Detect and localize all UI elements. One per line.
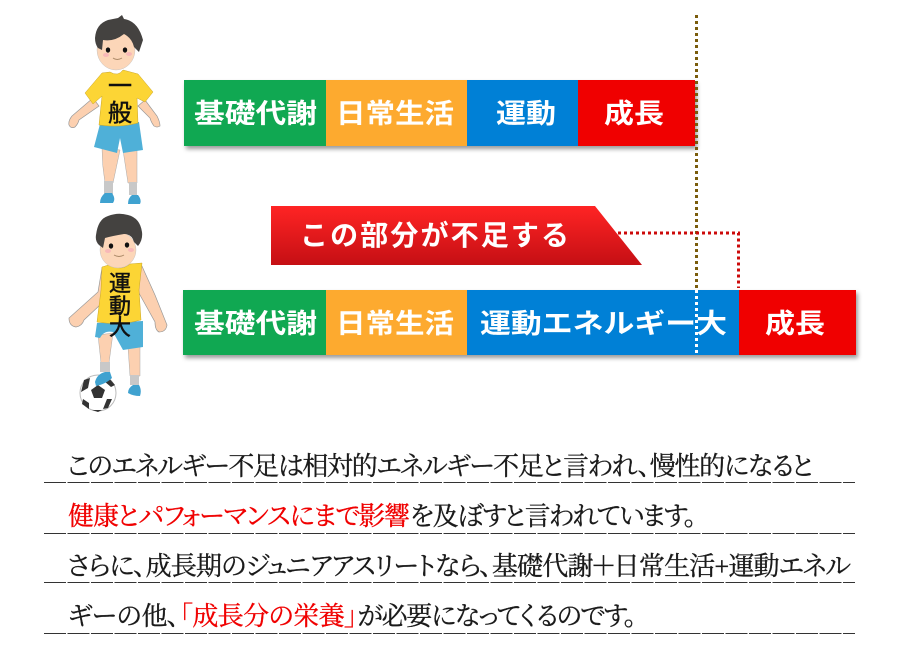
segment: basal metabolism bbox=[184, 80, 326, 146]
segment: basal metabolism: 基礎代謝 bbox=[194, 99, 317, 129]
segment: daily life: 日常生活 bbox=[336, 309, 454, 339]
reference line: ordinary total bbox=[695, 15, 698, 355]
text line 3: さらに、成長期のジュニアアスリートなら、基礎代謝＋日常生活+運動エネル bbox=[67, 552, 851, 581]
segment: exercise: 運動 bbox=[496, 99, 556, 129]
figure: active boy with ball bbox=[69, 214, 167, 412]
segment: daily life bbox=[326, 290, 467, 355]
text line 2: を及ぼすと言われています。 bbox=[410, 502, 697, 531]
shirt label: 一般: 般 bbox=[108, 100, 132, 127]
segment: growth bbox=[739, 290, 856, 355]
bar: high-activity energy breakdown bbox=[183, 290, 856, 355]
text line 4: ギーの他、 bbox=[68, 602, 180, 631]
segment: daily life bbox=[326, 80, 467, 146]
segment: growth: 成長 bbox=[604, 99, 664, 129]
icon: soccer ball bbox=[80, 375, 116, 412]
segment: growth: 成長 bbox=[765, 309, 825, 339]
bar: ordinary energy breakdown bbox=[184, 80, 695, 146]
connector: banner to growth segment bbox=[618, 233, 738, 288]
shirt label: 一般 bbox=[108, 73, 132, 127]
callout banner: shortage bbox=[271, 206, 642, 265]
text line 2: 健康とパフォーマンスにまで影響 bbox=[68, 502, 410, 531]
text line 1: このエネルギー不足は相対的エネルギー不足と言われ、慢性的になると bbox=[67, 452, 814, 481]
figure: ordinary boy bbox=[69, 15, 160, 204]
segment: exercise bbox=[467, 80, 578, 146]
segment: basal metabolism bbox=[183, 290, 326, 355]
shirt label: 運動大: 運 bbox=[109, 271, 131, 296]
segment: growth bbox=[578, 80, 695, 146]
text line 4: 「成長分の栄養」 bbox=[180, 602, 357, 631]
segment: exercise energy large: 運動エネルギー大 bbox=[480, 309, 727, 339]
segment: exercise energy large bbox=[467, 290, 739, 355]
shirt label: 運動大: 動 bbox=[109, 294, 131, 319]
shirt label: 一般: 一 bbox=[108, 73, 132, 100]
shirt label: 運動大 bbox=[109, 271, 131, 340]
text line 4: が必要になってくるのです。 bbox=[357, 602, 637, 631]
text block: explanation bbox=[67, 452, 851, 631]
shirt label: 運動大: 大 bbox=[109, 315, 131, 340]
callout banner: shortage: この部分が不足する bbox=[300, 219, 569, 251]
segment: daily life: 日常生活 bbox=[336, 99, 454, 129]
segment: basal metabolism: 基礎代謝 bbox=[194, 309, 317, 339]
